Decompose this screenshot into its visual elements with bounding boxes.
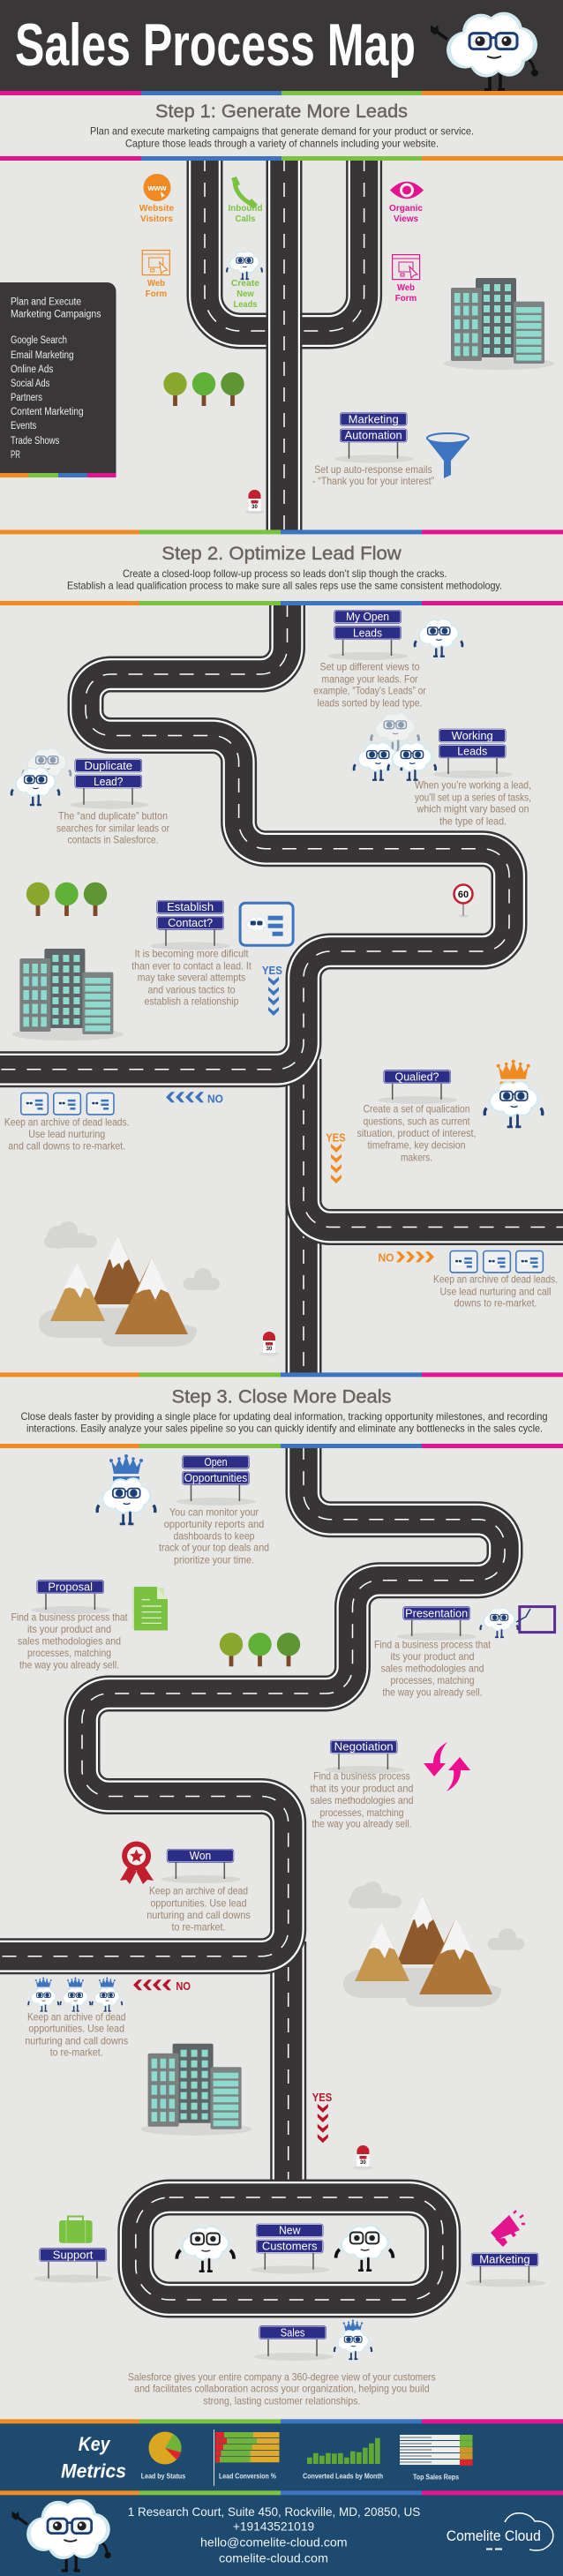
sign: open opportunities: Opportunities bbox=[184, 1472, 247, 1484]
icon: crowned cloud orange bbox=[484, 1060, 543, 1127]
text: archive leads left bbox=[4, 1116, 129, 1152]
text: proposal: processes, matching bbox=[27, 1647, 111, 1659]
icon: funnel bbox=[427, 433, 469, 478]
icon: crowned cloud sales bbox=[334, 2319, 372, 2359]
contact details: 1 Research Court, Suite 450, Rockville, MD, 20850, US bbox=[128, 2505, 420, 2519]
sign: won bbox=[161, 1849, 241, 1883]
sign: qualified: Qualied? bbox=[395, 1070, 439, 1083]
mascot cloud: header bbox=[431, 12, 538, 90]
sign: negotiation: Negotiation bbox=[334, 1741, 394, 1754]
text: open opportunities: You can monitor your bbox=[169, 1506, 259, 1519]
text: won: opportunities. Use lead bbox=[150, 1897, 247, 1910]
illustration: buildings bbox=[443, 278, 554, 370]
intro text: step 1 bbox=[90, 125, 474, 150]
header band bbox=[0, 0, 563, 91]
arrow: yes blue: YES bbox=[262, 964, 282, 977]
panel: marketing campaigns: Email Marketing bbox=[11, 350, 74, 361]
mascot cloud: footer bbox=[12, 2499, 111, 2571]
text: establish contact bbox=[131, 948, 251, 1008]
icon: swap arrows bbox=[424, 1742, 470, 1791]
panel: marketing campaigns: Partners bbox=[11, 393, 42, 403]
contact details bbox=[128, 2505, 420, 2565]
panel: marketing campaigns: Google Search bbox=[11, 335, 67, 346]
sign: marketing: Marketing bbox=[479, 2254, 530, 2266]
text: archive leads left: and call downs to re-market. bbox=[8, 1139, 125, 1152]
text: closing statement: and facilitates collaboration across your organization, helping you build bbox=[134, 2383, 430, 2395]
heading: key metrics: Key bbox=[79, 2433, 111, 2455]
text: establish contact: establish a relationship bbox=[145, 995, 239, 1008]
sign: open opportunities: Open bbox=[205, 1456, 228, 1468]
road: step 3 bbox=[0, 1446, 505, 2300]
heading: step 2: Step 2. Optimize Lead Flow bbox=[161, 543, 402, 564]
sign: marketing automation bbox=[334, 412, 414, 462]
panel: marketing campaigns: Plan and Execute bbox=[11, 297, 81, 307]
sign: support: Support bbox=[53, 2249, 94, 2261]
label: create new leads: Leads bbox=[233, 299, 258, 310]
text: presentation: Find a business process that bbox=[374, 1639, 492, 1651]
illustration: trees bbox=[220, 1633, 300, 1666]
text: open opportunities: dashboards to keep bbox=[173, 1530, 255, 1543]
text: open opportunities bbox=[159, 1506, 269, 1566]
sign: my open leads bbox=[328, 610, 408, 660]
text: duplicate lead: The “and duplicate” button bbox=[58, 809, 168, 822]
text: proposal: its your product and bbox=[27, 1623, 111, 1635]
road: step 1 fork bbox=[205, 157, 364, 531]
icon: milestone bbox=[353, 2145, 372, 2169]
text: qualified bbox=[357, 1103, 477, 1164]
label: web form pink: Web bbox=[397, 282, 415, 293]
label: inbound calls: Calls bbox=[235, 214, 256, 224]
text: qualified: makers. bbox=[401, 1152, 432, 1164]
arrow: yes blue bbox=[262, 964, 282, 1016]
label: web form pink bbox=[395, 282, 417, 304]
arrow: no orange bbox=[378, 1250, 434, 1264]
arrow: yes red: YES bbox=[312, 2091, 332, 2104]
icon: crowned cloud blue bbox=[97, 1454, 155, 1524]
text: won: Keep an archive of dead bbox=[149, 1885, 248, 1897]
text: qualified: situation, product of interest, bbox=[357, 1127, 477, 1139]
contact details: comelite-cloud.com bbox=[219, 2550, 328, 2565]
chart: top sales reps table: Top Sales Reps bbox=[413, 2473, 459, 2481]
illustration: trees bbox=[163, 372, 244, 406]
text: duplicate lead: contacts in Salesforce. bbox=[67, 834, 159, 846]
label: web form orange: Form bbox=[146, 289, 167, 299]
icon: phone bbox=[231, 176, 258, 209]
panel: marketing campaigns: Marketing Campaigns bbox=[11, 309, 101, 319]
text: establish contact: It is becoming more dificult bbox=[134, 948, 249, 960]
text: archive opportunities: to re-market. bbox=[50, 2047, 103, 2059]
arrow: no blue: NO bbox=[207, 1092, 223, 1105]
icon: eye bbox=[390, 182, 424, 199]
panel: footer background bbox=[0, 2423, 563, 2576]
intro text: step 1: Capture those leads through a variety of channels including your website. bbox=[125, 138, 439, 150]
sign: marketing automation: Marketing bbox=[349, 413, 399, 425]
text: presentation: processes, matching bbox=[390, 1674, 475, 1686]
arrow: no blue bbox=[166, 1092, 223, 1105]
divider line bbox=[214, 2430, 215, 2486]
text: marketing automation: - “Thank you for your interest” bbox=[312, 475, 434, 487]
arrow: yes orange bbox=[326, 1130, 346, 1183]
text: closing statement: strong, lasting customer relationships. bbox=[203, 2394, 360, 2407]
icon: cloud left of new customers bbox=[176, 2226, 234, 2272]
label: web form orange bbox=[146, 278, 167, 299]
text: duplicate lead bbox=[56, 809, 169, 846]
icon: briefcase bbox=[59, 2217, 93, 2243]
panel: marketing campaigns: Events bbox=[11, 421, 36, 432]
icon: three clouds bbox=[354, 712, 436, 780]
logo: comelite cloud: Comelite Cloud bbox=[447, 2527, 541, 2544]
sign: new customers: Customers bbox=[262, 2241, 318, 2253]
text: negotiation: the way you already sell. bbox=[312, 1818, 411, 1830]
icon: website visitors bbox=[143, 174, 171, 201]
intro text: step 3 bbox=[21, 1410, 547, 1435]
sign: open opportunities bbox=[176, 1455, 256, 1506]
text: won: nurturing and call downs bbox=[146, 1909, 251, 1921]
icons: three crowned clouds bbox=[28, 1977, 122, 2011]
text: archive leads left: Use lead nurturing bbox=[28, 1128, 105, 1140]
text: archive opportunities: Keep an archive of dead bbox=[27, 2011, 125, 2024]
text: presentation: sales methodologies and bbox=[381, 1663, 484, 1675]
road: step 2 bbox=[0, 603, 563, 1375]
label: website visitors: Visitors bbox=[140, 214, 173, 224]
text: working leads: you’ll set up a series of tasks, bbox=[415, 791, 531, 803]
arrow: no red: NO bbox=[176, 1979, 191, 1993]
text: negotiation: Find a business process bbox=[313, 1770, 410, 1783]
icon: milestone bbox=[259, 1332, 279, 1356]
text: archive opportunities: nurturing and call downs bbox=[25, 2035, 128, 2047]
label: website visitors bbox=[139, 203, 174, 224]
panel: marketing campaigns: PR bbox=[11, 450, 20, 461]
icon: profile card large bbox=[240, 903, 293, 945]
text: my open leads: Set up different views to bbox=[319, 660, 420, 672]
illustration: buildings bbox=[12, 949, 124, 1040]
sign: my open leads: My Open bbox=[346, 611, 389, 623]
text: presentation bbox=[374, 1639, 492, 1699]
contact details: hello@comelite-cloud.com bbox=[200, 2535, 348, 2550]
sign: proposal: Proposal bbox=[48, 1581, 93, 1593]
text: establish contact: may take several attempts bbox=[138, 972, 245, 984]
sign: duplicate lead bbox=[70, 759, 149, 808]
icon: cloud right of new customers bbox=[336, 2225, 393, 2271]
chart: lead conversion stacked bars bbox=[215, 2432, 279, 2480]
text: archive opportunities: opportunities. Use lead bbox=[28, 2023, 124, 2035]
sign: working leads: Working bbox=[452, 730, 493, 742]
text: working leads bbox=[415, 778, 531, 827]
intro text: step 2: Establish a lead qualification process to make sure all sales reps use the same consistent methodology. bbox=[67, 580, 502, 592]
text: duplicate lead: searches for similar leads or bbox=[56, 822, 169, 834]
panel: marketing campaigns: Trade Shows bbox=[11, 436, 60, 447]
sign: establish contact: Contact? bbox=[168, 917, 213, 929]
text: won bbox=[146, 1885, 251, 1934]
sign: marketing bbox=[466, 2253, 545, 2287]
text: proposal: sales methodologies and bbox=[18, 1635, 121, 1648]
chart: lead by status pie: Lead by Status bbox=[141, 2472, 186, 2480]
chart: top sales reps table bbox=[400, 2435, 473, 2481]
text: presentation: its your product and bbox=[390, 1650, 475, 1663]
sign: presentation bbox=[397, 1606, 477, 1641]
text: negotiation: sales methodologies and bbox=[311, 1794, 413, 1806]
sign: duplicate lead: Lead? bbox=[94, 776, 124, 788]
illustration: trees bbox=[26, 882, 107, 916]
icon: website visitors: www bbox=[146, 184, 167, 192]
icon: milestone bbox=[245, 490, 265, 514]
text: qualified: timeframe, key decision bbox=[367, 1139, 466, 1152]
icons: archive cards right bbox=[450, 1250, 543, 1273]
icon: presenting cloud bbox=[481, 1607, 555, 1637]
text: presentation: the way you already sell. bbox=[383, 1686, 482, 1699]
label: create new leads: New bbox=[236, 289, 254, 299]
text: archive opportunities bbox=[25, 2011, 128, 2059]
text: establish contact: than ever to contact a lead. It bbox=[131, 959, 251, 972]
sign: presentation: Presentation bbox=[405, 1607, 468, 1619]
label: website visitors: Website bbox=[139, 203, 174, 214]
text: archive leads left: Keep an archive of dead leads. bbox=[4, 1116, 129, 1129]
text: negotiation: processes, matching bbox=[319, 1806, 404, 1819]
panel: marketing campaigns: Content Marketing bbox=[11, 407, 84, 417]
text: my open leads: manage your leads. For bbox=[321, 672, 418, 685]
sign: duplicate lead: Duplicate bbox=[85, 760, 132, 772]
title: Sales Process Map bbox=[15, 11, 416, 79]
label: web form orange: Web bbox=[147, 278, 165, 289]
intro text: step 1: Plan and execute marketing campaigns that generate demand for your product or service. bbox=[90, 125, 474, 138]
heading: step 1: Step 1: Generate More Leads bbox=[155, 101, 408, 122]
sign: establish contact bbox=[151, 900, 230, 950]
text: archive leads right: Use lead nurturing and call bbox=[439, 1286, 551, 1298]
text: working leads: the type of lead. bbox=[439, 815, 507, 827]
sign: marketing automation: Automation bbox=[345, 430, 402, 442]
label: inbound calls bbox=[228, 203, 263, 224]
intro text: step 2 bbox=[67, 567, 502, 592]
sign: sales bbox=[254, 2325, 334, 2361]
sign: won: Won bbox=[190, 1850, 211, 1862]
icon: web form pink bbox=[393, 255, 420, 280]
sign: proposal bbox=[32, 1580, 111, 1614]
sign: qualified bbox=[378, 1070, 457, 1104]
heading: key metrics: Metrics bbox=[61, 2460, 126, 2482]
heading: step 3: Step 3. Close More Deals bbox=[171, 1386, 392, 1407]
label: web form pink: Form bbox=[395, 293, 417, 304]
illustration: buildings bbox=[140, 2044, 251, 2136]
sign: my open leads: Leads bbox=[353, 627, 382, 639]
text: establish contact: and various tactics to bbox=[148, 984, 236, 996]
icon: small cloud bbox=[227, 251, 262, 279]
heading: key metrics bbox=[61, 2433, 126, 2482]
text: proposal: the way you already sell. bbox=[19, 1659, 119, 1671]
panel: marketing campaigns bbox=[0, 282, 116, 477]
panel: marketing campaigns: Social Ads bbox=[11, 379, 50, 389]
text: my open leads bbox=[313, 660, 426, 710]
label: organic views: Organic bbox=[389, 203, 423, 214]
label: create new leads bbox=[231, 278, 259, 310]
sign: support bbox=[34, 2248, 113, 2282]
text: open opportunities: opportunity reports and bbox=[164, 1518, 264, 1530]
text: archive leads right bbox=[433, 1273, 558, 1310]
arrow: no red bbox=[133, 1979, 191, 1993]
icon: milestone: 30 bbox=[266, 1347, 273, 1352]
icon: cloud with sunglasses bbox=[415, 619, 462, 657]
icons: archive cards left bbox=[21, 1093, 114, 1115]
chart: lead by status pie bbox=[141, 2432, 186, 2480]
text: closing statement: Salesforce gives your entire company a 360-degree view of your customers bbox=[128, 2371, 436, 2384]
icon: duplicate clouds bbox=[11, 747, 71, 805]
arrow: no orange: NO bbox=[378, 1250, 394, 1264]
label: organic views bbox=[389, 203, 423, 224]
illustration: mountains bbox=[39, 1221, 220, 1347]
text: working leads: When you’re working a lead, bbox=[415, 778, 531, 791]
text: negotiation: that its your product and bbox=[311, 1783, 413, 1795]
text: qualified: questions, such as current bbox=[364, 1115, 470, 1128]
text: my open leads: example, “Today’s Leads” or bbox=[313, 685, 426, 697]
text: my open leads: leads sorted by lead type. bbox=[318, 697, 422, 710]
text: open opportunities: prioritize your time. bbox=[174, 1554, 254, 1566]
text: open opportunities: track of your top deals and bbox=[159, 1542, 269, 1554]
panel: marketing campaigns: Online Ads bbox=[11, 364, 54, 375]
contact details: +19143521019 bbox=[233, 2520, 314, 2534]
icon: speed limit sign bbox=[454, 884, 473, 918]
intro text: step 2: Create a closed-loop follow-up process so leads don’t slip though the cracks. bbox=[123, 567, 447, 580]
sign: working leads: Leads bbox=[457, 746, 487, 758]
logo: comelite cloud bbox=[447, 2513, 553, 2550]
text: closing statement bbox=[128, 2371, 436, 2407]
icon: milestone: 30 bbox=[251, 505, 258, 510]
label: organic views: Views bbox=[394, 214, 418, 224]
sign: sales: Sales bbox=[281, 2326, 304, 2339]
text: proposal bbox=[11, 1611, 128, 1671]
illustration: mountains bbox=[343, 1881, 524, 2007]
sign: working leads bbox=[433, 729, 513, 778]
text: working leads: which might vary based on bbox=[417, 803, 529, 815]
text: archive leads right: downs to re-market. bbox=[454, 1297, 537, 1310]
chart: converted leads by month: Converted Leads by Month bbox=[303, 2472, 383, 2480]
sign: new customers bbox=[251, 2224, 330, 2273]
icon: megaphone bbox=[491, 2211, 525, 2247]
chart: lead conversion stacked bars: Lead Conversion % bbox=[219, 2472, 276, 2480]
text: won: to re-market. bbox=[171, 1921, 226, 1934]
icon: document bbox=[132, 1587, 168, 1631]
text: negotiation bbox=[311, 1770, 413, 1830]
text: marketing automation: Set up auto-response emails bbox=[314, 463, 432, 476]
label: inbound calls: Inbound bbox=[228, 203, 263, 214]
chart: converted leads by month bbox=[303, 2438, 383, 2480]
arrow: yes orange: YES bbox=[326, 1130, 346, 1144]
arrow: yes red bbox=[312, 2091, 332, 2143]
sign: negotiation bbox=[325, 1740, 404, 1774]
text: qualified: Create a set of qualication bbox=[364, 1103, 469, 1115]
text: marketing automation bbox=[312, 463, 434, 487]
sign: new customers: New bbox=[279, 2225, 301, 2237]
icon: speed limit sign: 60 bbox=[458, 890, 469, 900]
text: proposal: Find a business process that bbox=[11, 1611, 128, 1624]
icon: milestone: 30 bbox=[360, 2160, 366, 2166]
sign: establish contact: Establish bbox=[167, 901, 214, 913]
label: create new leads: Create bbox=[231, 278, 259, 289]
icon: award ribbon bbox=[120, 1841, 154, 1884]
icon: web form orange bbox=[142, 251, 169, 275]
